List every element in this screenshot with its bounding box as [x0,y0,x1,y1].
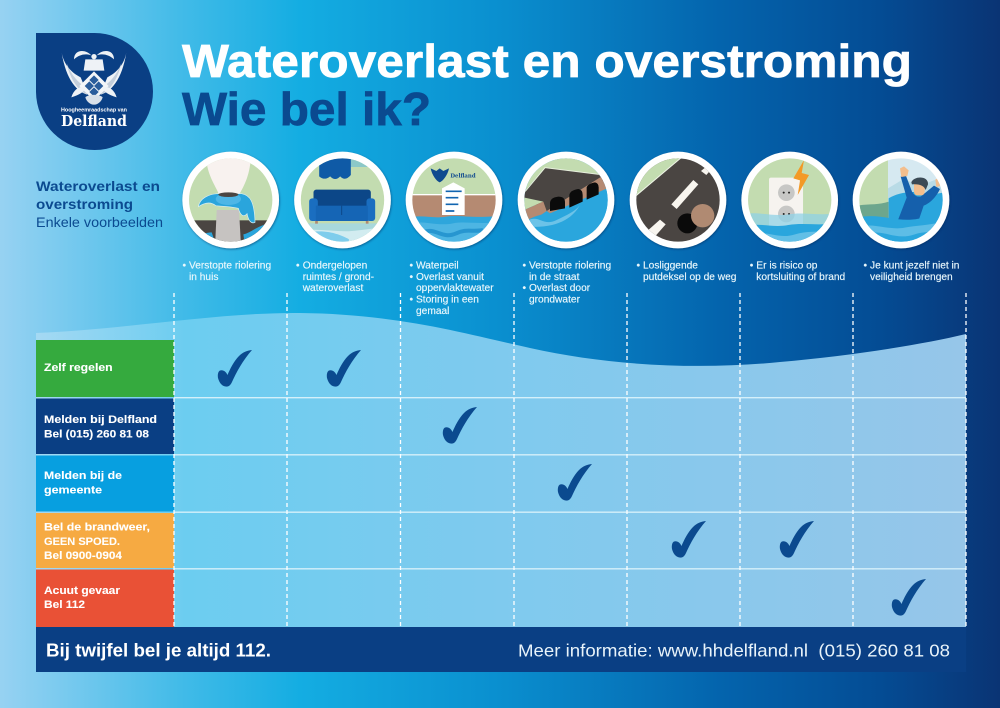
icon: toilet overflow [182,152,282,248]
examples text: column 6: kortsluiting of brand [756,272,846,283]
examples text: column 3: Overlast vanuit [416,272,484,283]
row: Melden bij Delfland: Melden bij Delfland [44,414,157,426]
icon: blocked street drain [518,152,617,248]
examples text: column 5: • [636,260,640,272]
row: Bel de brandweer: GEEN SPOED. [44,536,120,548]
icon: flooded socket with lightning [741,152,838,248]
row: Zelf regelen [36,340,174,397]
examples text: column 3: • [410,272,414,283]
row: Bel de brandweer [36,513,174,568]
examples text: column 7 [864,260,959,283]
examples text: column 4: Verstopte riolering [529,260,611,272]
examples text: column 5 [636,260,737,283]
examples text: column 4: grondwater [529,294,581,306]
side heading: Wateroverlast en [36,178,160,194]
title: Wateroverlast en overstroming [182,35,912,87]
row: Acuut gevaar: Acuut gevaar [44,585,121,597]
examples text: column 6: • [750,260,754,272]
row: Melden bij Delfland [36,398,174,454]
examples text: column 1 [182,260,271,283]
examples text: column 5: putdeksel op de weg [643,272,737,283]
examples text: column 4 [522,260,611,306]
wave table background [36,313,966,627]
icon: pumping station [406,152,503,248]
icon: pumping station: Delfland [450,173,476,179]
examples text: column 7: veiligheid brengen [870,272,953,283]
examples text: column 5: Losliggende [643,260,698,272]
examples text: column 4: Overlast door [529,283,591,294]
logo small text: Hoogheemraadschap van [61,108,127,114]
examples text: column 3: Storing in een [416,294,479,306]
examples text: column 4: in de straat [529,272,580,283]
examples text: column 1: Verstopte riolering [189,260,271,272]
examples text: column 6 [750,260,846,283]
footer bar [36,627,966,672]
examples text: column 4: • [522,283,526,294]
examples text: column 3: • [410,294,414,306]
side heading: overstroming [36,196,133,212]
row: Melden bij Delfland: Bel (015) 260 81 08 [44,428,149,440]
row: Melden bij de gemeente: Melden bij de [44,470,122,482]
logo name: Delfland [61,112,127,130]
examples text: column 2: Ondergelopen [303,260,367,272]
side heading [36,178,163,230]
examples text: column 3: • [410,260,414,272]
title [182,35,912,135]
examples text: column 6: Er is risico op [756,260,818,272]
examples text: column 3 [410,260,494,317]
icon: loose manhole cover [630,152,728,248]
row: Acuut gevaar [36,570,174,627]
icon: coat of arms [62,51,126,105]
examples text: column 2: wateroverlast [302,283,363,294]
logo: Delfland [36,33,153,150]
examples text: column 3: oppervlaktewater [416,283,494,294]
row: Melden bij de gemeente: gemeente [44,484,102,496]
examples text: column 2: • [296,260,300,272]
icon: person in flood water [853,152,949,248]
row: Zelf regelen: Zelf regelen [44,362,113,374]
checkmarks [218,350,926,616]
examples text: column 3: gemaal [416,306,449,317]
examples text: column 1: in huis [189,272,218,283]
row: Bel de brandweer: Bel 0900-0904 [44,550,123,562]
examples text: column 3: Waterpeil [416,260,459,272]
row: Bel de brandweer: Bel de brandweer, [44,522,150,534]
footer bar: Meer informatie: www.hhdelfland.nl (015) 260 81 08 [518,640,950,660]
footer bar: Bij twijfel bel je altijd 112. [46,641,271,661]
examples text: column 2 [296,260,374,294]
icon: flooded room with sofa [294,152,392,248]
examples text: column 7: • [864,260,868,272]
side heading: Enkele voorbeelden [36,214,163,230]
examples text: column 1: • [182,260,186,272]
examples text: column 2: ruimtes / grond- [303,272,374,283]
row: Acuut gevaar: Bel 112 [44,599,85,611]
row: Melden bij de gemeente [36,456,174,512]
examples text: column 4: • [522,260,526,272]
title: Wie bel ik? [182,83,431,135]
examples text: column 7: Je kunt jezelf niet in [870,260,959,272]
